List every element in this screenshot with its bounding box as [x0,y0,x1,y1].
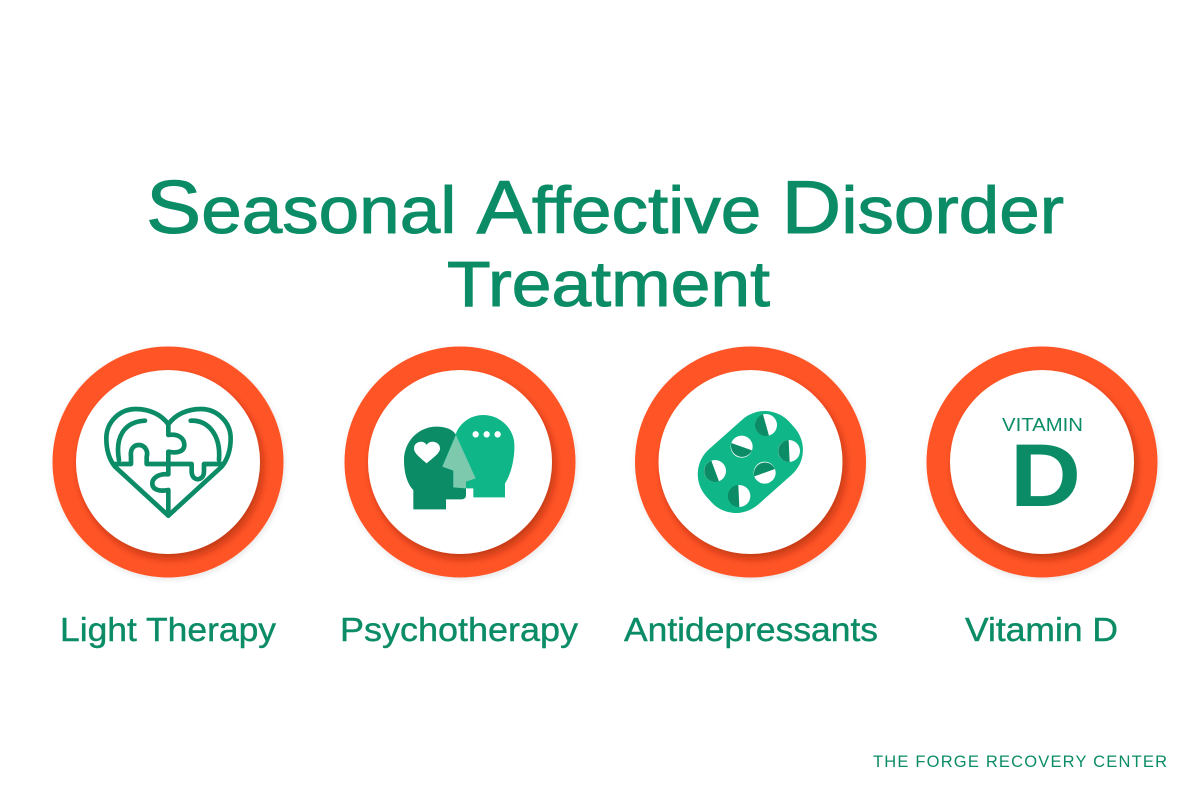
panel: light therapy [52,346,284,648]
label: antidepressants: Antidepressants [624,611,878,648]
ring: light therapy [52,346,284,578]
icon: puzzle heart [106,409,231,516]
label: psychotherapy: Psychotherapy [340,611,579,648]
title [146,165,1064,320]
footer credit: THE FORGE RECOVERY CENTER [873,753,1167,771]
title: Seasonal Affective Disorder [146,165,1064,249]
label: light therapy: Light Therapy [60,611,277,648]
icon: two heads [404,415,514,509]
panel: psychotherapy [340,346,579,648]
icon: vitamin d: VITAMIN [1002,415,1083,435]
title: Treatment [447,248,770,320]
icon: vitamin d: D [1010,425,1081,525]
ring: psychotherapy [344,346,576,578]
ring: vitamin d [926,346,1158,578]
icon: pill blister pack [684,397,817,527]
ring: antidepressants [635,346,866,578]
panel: antidepressants [624,346,878,648]
label: vitamin d: Vitamin D [965,611,1118,648]
panel: vitamin d [926,346,1158,648]
